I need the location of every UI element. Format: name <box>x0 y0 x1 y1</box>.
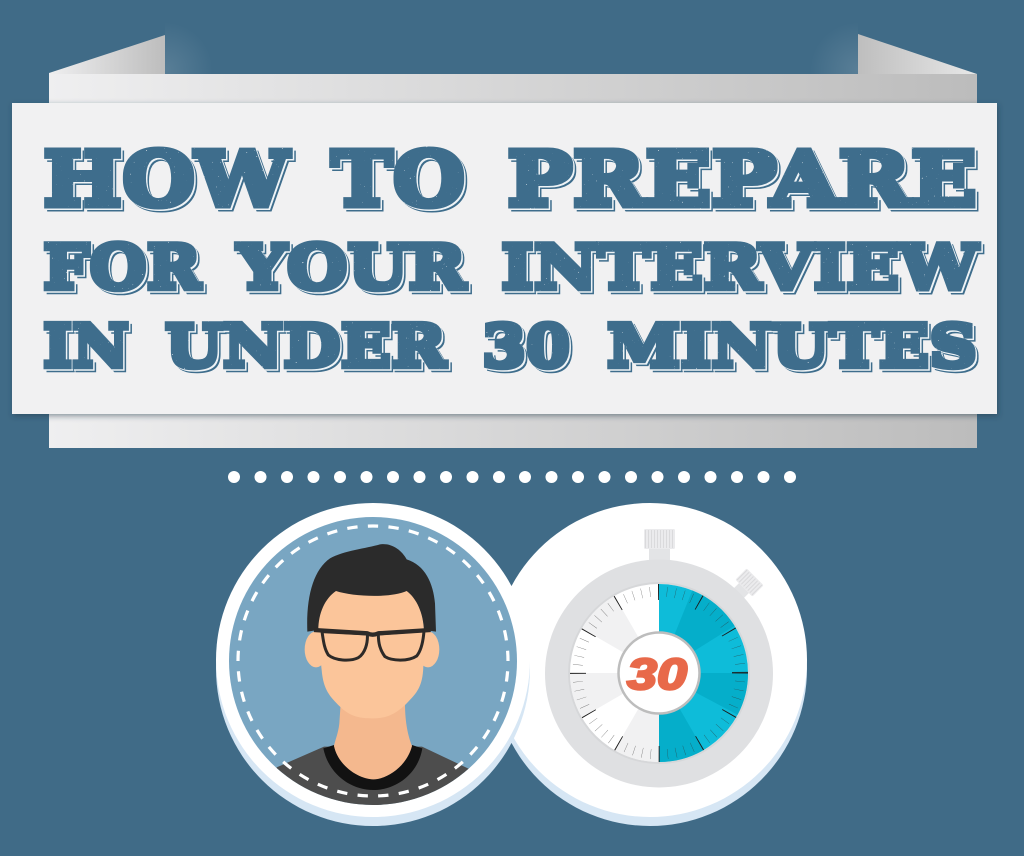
stopwatch side button <box>730 568 764 602</box>
right flap <box>858 34 977 75</box>
title line 2 <box>43 233 980 303</box>
neck <box>334 703 412 779</box>
shirt <box>276 746 469 805</box>
back band <box>49 74 977 448</box>
dial minor ticks <box>578 592 740 754</box>
title line 3: MINUTES <box>607 313 977 380</box>
title <box>43 137 980 380</box>
badge: stopwatch <box>493 503 807 826</box>
title line 3: 30 <box>482 313 570 380</box>
badge disc <box>216 503 530 817</box>
badge shadow <box>216 512 530 826</box>
badge disc <box>493 503 807 817</box>
shirt collar <box>323 745 422 790</box>
front panel <box>12 103 997 414</box>
title line 2: FOR <box>43 233 202 303</box>
left flap <box>49 35 165 75</box>
title line 2: YOUR <box>236 233 467 303</box>
title line 3 <box>43 313 977 380</box>
hair <box>307 544 436 632</box>
dotted divider <box>228 471 796 483</box>
title line 3: UNDER <box>165 313 447 380</box>
stopwatch top crown <box>644 529 675 562</box>
avatar <box>277 544 470 823</box>
right fold highlight <box>810 22 858 74</box>
stopwatch inner rim <box>568 582 750 764</box>
inner blue circle <box>229 517 517 805</box>
title line 3: IN <box>43 313 129 380</box>
title line 2: INTERVIEW <box>501 233 980 303</box>
title line 1 <box>43 137 977 223</box>
title line 1: PREPARE <box>507 137 977 223</box>
banner: folded paper <box>12 22 997 448</box>
glasses <box>314 630 431 660</box>
hub number: 30 <box>627 650 688 699</box>
center hub <box>618 632 700 714</box>
ears <box>305 631 439 667</box>
dial face <box>570 584 748 762</box>
stopwatch case <box>545 560 773 788</box>
face <box>317 590 424 718</box>
left fold highlight <box>165 22 213 74</box>
title line 1: HOW <box>43 137 290 223</box>
dial major ticks <box>578 592 740 754</box>
stitched dashed ring <box>238 526 508 796</box>
badge shadow <box>493 512 807 826</box>
badge: person <box>216 503 530 826</box>
title line 1: TO <box>331 137 465 223</box>
